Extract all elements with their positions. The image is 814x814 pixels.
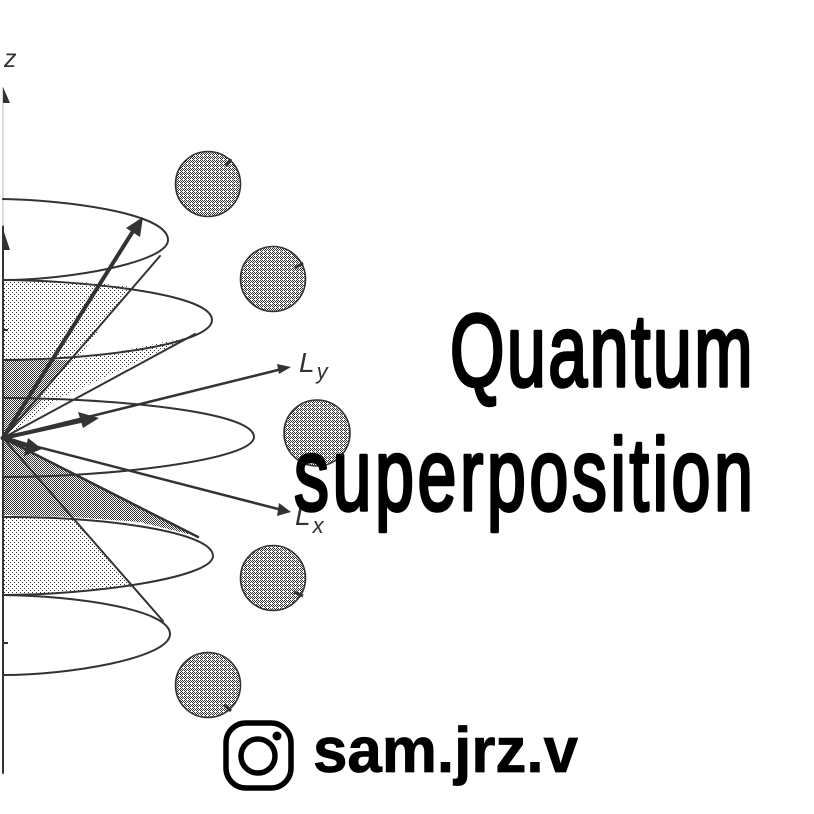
title xyxy=(294,292,753,532)
label Ly: L xyxy=(299,347,315,378)
sphere 4 xyxy=(240,546,306,610)
handle: sam.jrz.v xyxy=(313,714,578,786)
sphere 3 xyxy=(284,400,350,466)
ellipse 3 xyxy=(3,398,254,477)
Lx axis arrow xyxy=(3,438,282,510)
shaded cone regions xyxy=(4,280,192,595)
title: superposition xyxy=(294,416,753,532)
Ly axis arrow xyxy=(3,369,282,438)
ellipse 4 xyxy=(3,517,213,595)
ellipse 5 xyxy=(3,595,170,675)
label Ly: y xyxy=(315,359,330,384)
thick vector arrow xyxy=(3,228,135,438)
sphere 1 xyxy=(176,152,240,216)
title: Quantum xyxy=(450,292,753,408)
ellipse 1 xyxy=(3,199,168,280)
sphere 5 xyxy=(176,652,240,718)
axis arrowheads xyxy=(3,87,10,644)
axis z xyxy=(2,225,4,773)
label Lx: L xyxy=(295,500,311,531)
icon: instagram xyxy=(226,723,291,788)
ellipse 2 xyxy=(3,280,212,360)
sphere 2 xyxy=(240,246,306,312)
cone lines xyxy=(3,256,160,438)
diagram: quantized angular momentum cones xyxy=(3,87,291,773)
label z: z xyxy=(3,45,17,73)
label Lx: x xyxy=(312,513,325,538)
